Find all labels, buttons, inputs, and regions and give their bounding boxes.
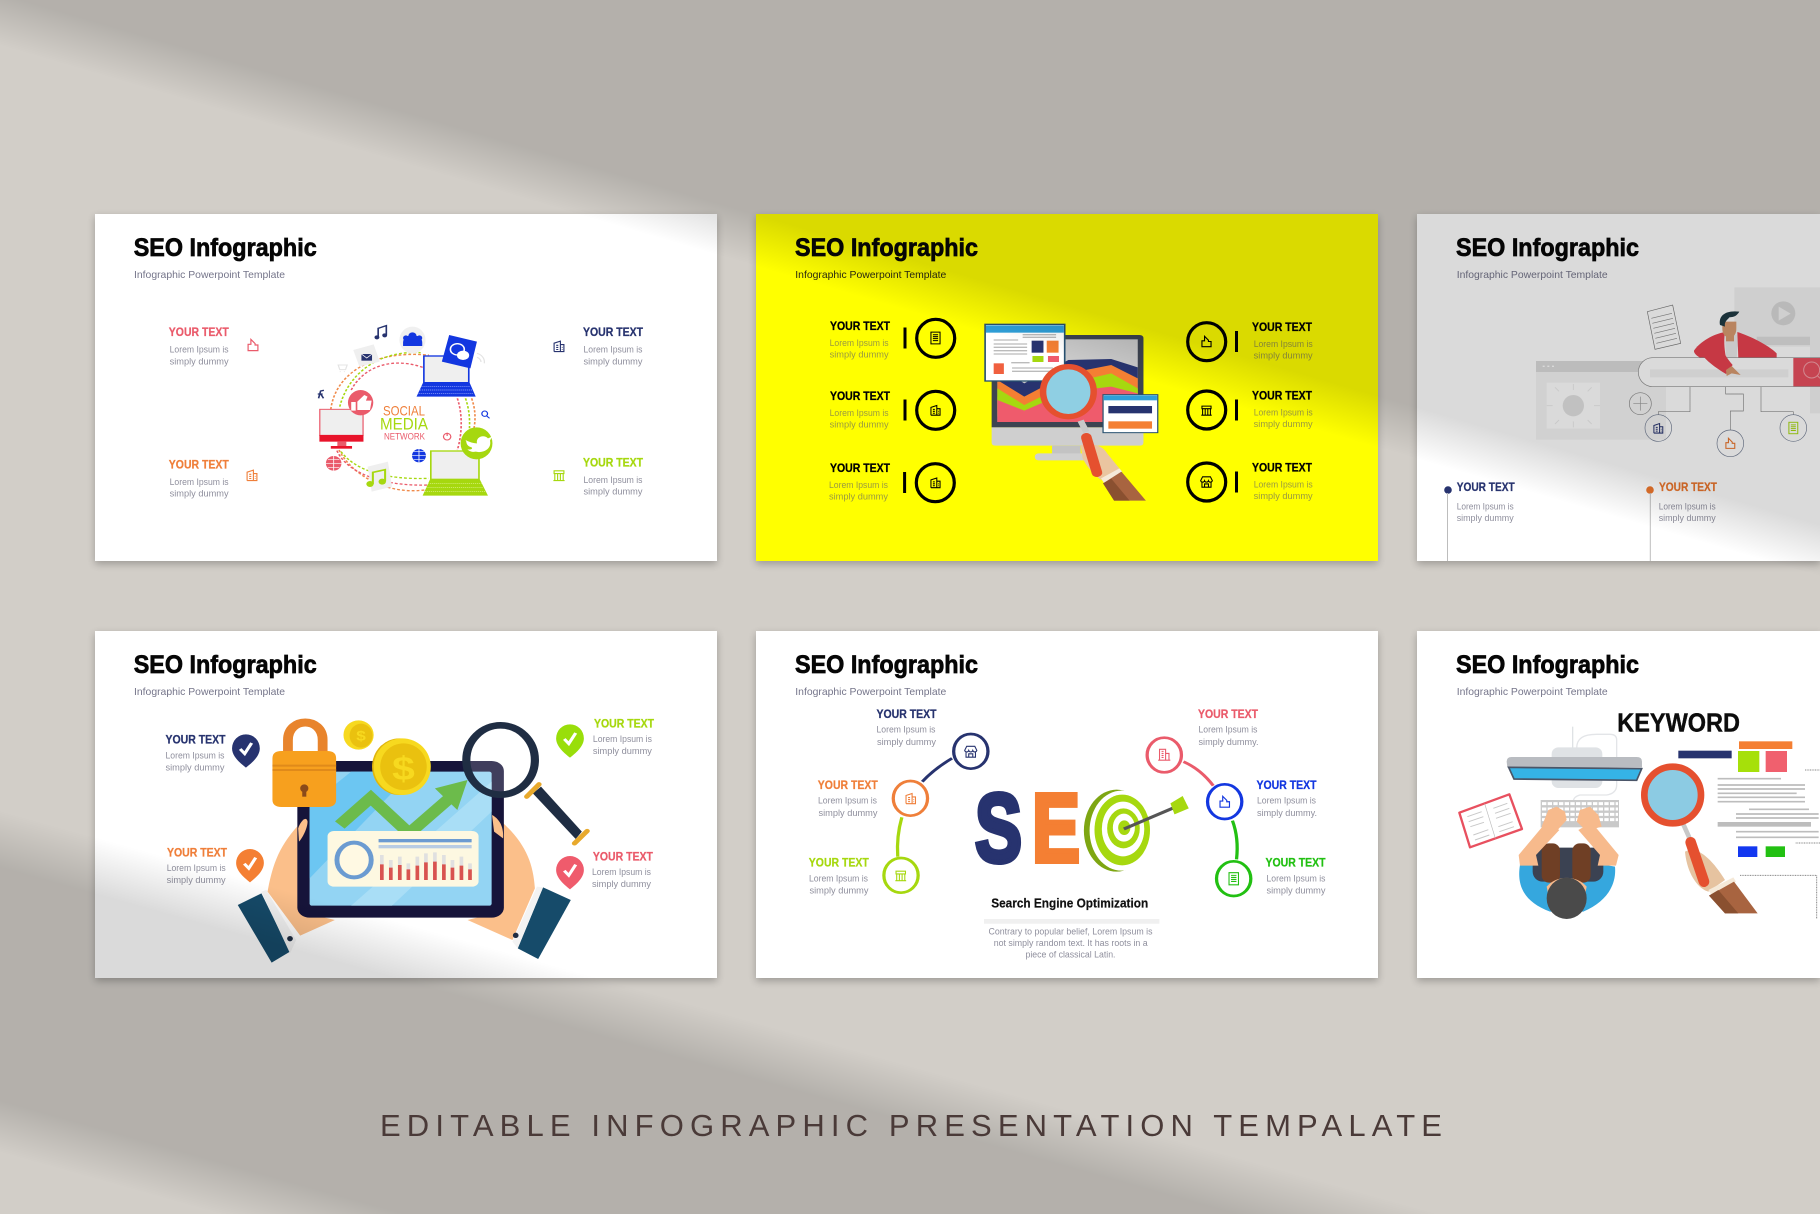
body paragraph: not simply random text. It has roots in a	[994, 938, 1148, 948]
text block: right 2: Lorem Ipsum is	[1254, 407, 1313, 417]
body paragraph	[984, 919, 1159, 960]
icon group: right circles	[1188, 323, 1236, 501]
illustration: monitor and magnifier	[985, 324, 1158, 501]
text block: green: YOUR TEXT	[583, 455, 644, 469]
text block: navy	[876, 707, 937, 747]
text block: left 3	[829, 461, 891, 502]
text block: red: YOUR TEXT	[1198, 707, 1259, 721]
text block: navy: Lorem Ipsum is	[876, 725, 936, 735]
illustration: tablet held in hands: $	[392, 750, 415, 787]
text block: left 1: simply dummy	[830, 350, 889, 360]
text block: navy: simply dummy	[584, 356, 643, 366]
text block: green	[1266, 855, 1326, 896]
text block: orange: YOUR TEXT	[167, 845, 228, 859]
text block: blue: YOUR TEXT	[1256, 778, 1317, 792]
text block: green	[583, 455, 644, 497]
text block: navy: Lorem Ipsum is	[166, 750, 225, 760]
text block: orange	[818, 778, 878, 818]
text block: right 1	[1252, 320, 1313, 361]
word art: S E: S	[975, 774, 1022, 882]
title: SEO Infographic	[795, 234, 978, 262]
text block: left 1: Lorem Ipsum is	[830, 338, 889, 348]
illustration: tablet held in hands	[232, 720, 587, 963]
icons: step circles	[895, 746, 1238, 885]
word art: S E: E	[1032, 774, 1080, 882]
icon group: left circles	[905, 319, 955, 502]
icon: navy building	[554, 341, 564, 352]
body paragraph: Contrary to popular belief, Lorem Ipsum is	[988, 926, 1153, 936]
text block: red: simply dummy	[170, 356, 229, 366]
text block: right 2: simply dummy	[1254, 419, 1313, 429]
icon: red hand	[248, 339, 258, 351]
text block: navy	[583, 325, 644, 366]
title: SEO Infographic	[134, 234, 317, 262]
timeline: navy: simply dummy	[1457, 513, 1514, 523]
body paragraph: piece of classical Latin.	[1026, 950, 1116, 960]
text block: left 3: Lorem Ipsum is	[829, 480, 888, 490]
text block: green: YOUR TEXT	[594, 716, 655, 730]
text block: left 3: YOUR TEXT	[830, 461, 891, 475]
text block: left 3: simply dummy	[829, 492, 889, 502]
text block: navy: YOUR TEXT	[166, 733, 226, 747]
text block: green: Lorem Ipsum is	[593, 734, 652, 744]
icon: orange office	[247, 470, 257, 481]
subtitle: Infographic Powerpoint Template	[1457, 270, 1608, 281]
text block: red: YOUR TEXT	[593, 849, 653, 863]
subtitle: Infographic Powerpoint Template	[134, 687, 285, 698]
text block: red: simply dummy	[592, 879, 652, 889]
label: social media network: NETWORK	[384, 432, 426, 442]
text block: green: YOUR TEXT	[1266, 855, 1326, 869]
illustration: person at computer with magnifier	[1459, 727, 1820, 919]
text block: lime	[809, 855, 869, 896]
illustration: person on search bar	[1536, 287, 1820, 457]
text block: navy: YOUR TEXT	[583, 325, 644, 339]
timeline: orange: simply dummy	[1659, 513, 1716, 523]
text block: red	[169, 325, 229, 366]
text block: green: simply dummy	[584, 487, 643, 497]
text block: red	[1198, 707, 1259, 747]
text block: lime: Lorem Ipsum is	[809, 873, 868, 883]
text block: red: Lorem Ipsum is	[170, 345, 229, 355]
subtitle: Infographic Powerpoint Template	[1457, 687, 1608, 698]
text block: green: Lorem Ipsum is	[1266, 873, 1326, 883]
timeline: orange	[1646, 480, 1718, 561]
text block: right 3: YOUR TEXT	[1252, 460, 1313, 474]
timeline: navy	[1444, 480, 1515, 561]
text block: green: simply dummy	[593, 746, 652, 756]
timeline: navy: YOUR TEXT	[1457, 480, 1515, 494]
text block: left 1	[830, 319, 891, 360]
text block: right 3: simply dummy	[1254, 491, 1313, 501]
illustration: tablet held in hands: $	[356, 729, 366, 744]
text block: blue: Lorem Ipsum is	[1257, 796, 1316, 806]
panel: yellow SEO slide	[756, 214, 1378, 564]
icon: green bank	[553, 471, 565, 481]
text block: right 1: simply dummy	[1254, 351, 1313, 361]
text block: lime: simply dummy	[810, 886, 869, 896]
panel: search bar slide	[1417, 214, 1820, 564]
illustration: social media network	[318, 326, 492, 496]
title: SEO Infographic	[1456, 234, 1639, 262]
subtitle: Infographic Powerpoint Template	[795, 687, 947, 698]
text block: orange: Lorem Ipsum is	[167, 863, 226, 873]
text block: orange: YOUR TEXT	[169, 457, 229, 471]
text block: red: Lorem Ipsum is	[592, 867, 651, 877]
text block: red: YOUR TEXT	[169, 325, 229, 339]
subtitle: Infographic Powerpoint Template	[795, 270, 947, 281]
text block: green	[593, 716, 655, 756]
text block: orange: simply dummy	[818, 808, 878, 818]
text block: left 2: simply dummy	[830, 420, 889, 430]
text block: right 3: Lorem Ipsum is	[1254, 479, 1313, 489]
text block: blue	[1256, 778, 1317, 818]
text block: navy: Lorem Ipsum is	[584, 345, 643, 355]
heading: search engine optimization: Search Engine Optimization	[991, 897, 1148, 911]
text block: orange: Lorem Ipsum is	[818, 796, 877, 806]
timeline: navy: Lorem Ipsum is	[1457, 501, 1514, 511]
text block: navy: YOUR TEXT	[876, 707, 937, 721]
text block: orange	[167, 845, 228, 885]
text block: right 1: YOUR TEXT	[1252, 320, 1313, 334]
label: social media network: MEDIA	[380, 414, 429, 434]
heading: keyword: KEYWORD	[1617, 708, 1740, 738]
text block: red: Lorem Ipsum is	[1198, 725, 1258, 735]
text block: right 2	[1252, 388, 1313, 429]
text block: orange: YOUR TEXT	[818, 778, 878, 792]
label: social media network	[380, 403, 429, 442]
title: SEO Infographic	[134, 651, 317, 679]
title: SEO Infographic	[1456, 651, 1639, 679]
text block: right 3	[1252, 460, 1313, 501]
text block: navy: simply dummy	[877, 737, 937, 747]
text block: orange: Lorem Ipsum is	[170, 477, 229, 487]
panel: keyword slide	[1417, 631, 1820, 981]
text block: orange: simply dummy	[170, 489, 229, 499]
text block: right 1: Lorem Ipsum is	[1254, 339, 1313, 349]
text block: navy: simply dummy	[166, 762, 225, 772]
panel: SEO target slide	[756, 631, 1378, 981]
text block: left 2	[830, 389, 891, 430]
text block: navy	[166, 733, 226, 772]
timeline: orange: Lorem Ipsum is	[1659, 501, 1716, 511]
footer caption: EDITABLE INFOGRAPHIC PRESENTATION TEMPALATE	[380, 1108, 1442, 1143]
text block: left 1: YOUR TEXT	[830, 319, 891, 333]
panel: tablet analytics slide	[95, 631, 717, 981]
text block: right 2: YOUR TEXT	[1252, 388, 1313, 402]
label: social media network: SOCIAL	[383, 403, 425, 419]
timeline: orange: YOUR TEXT	[1659, 480, 1718, 494]
text block: green: Lorem Ipsum is	[584, 475, 643, 485]
panel: social media network slide	[95, 214, 717, 564]
text block: lime: YOUR TEXT	[809, 855, 869, 869]
text block: left 2: Lorem Ipsum is	[830, 408, 889, 418]
text block: orange: simply dummy	[167, 875, 226, 885]
text block: blue: simply dummy.	[1257, 808, 1317, 818]
subtitle: Infographic Powerpoint Template	[134, 270, 285, 281]
text block: red: simply dummy.	[1198, 737, 1258, 747]
illustration: target and step circles	[884, 734, 1251, 896]
text block: left 2: YOUR TEXT	[830, 389, 891, 403]
text block: orange	[169, 457, 229, 499]
text block: red	[592, 849, 653, 889]
text block: green: simply dummy	[1266, 886, 1326, 896]
word art: S E	[975, 774, 1080, 882]
title: SEO Infographic	[795, 651, 978, 679]
